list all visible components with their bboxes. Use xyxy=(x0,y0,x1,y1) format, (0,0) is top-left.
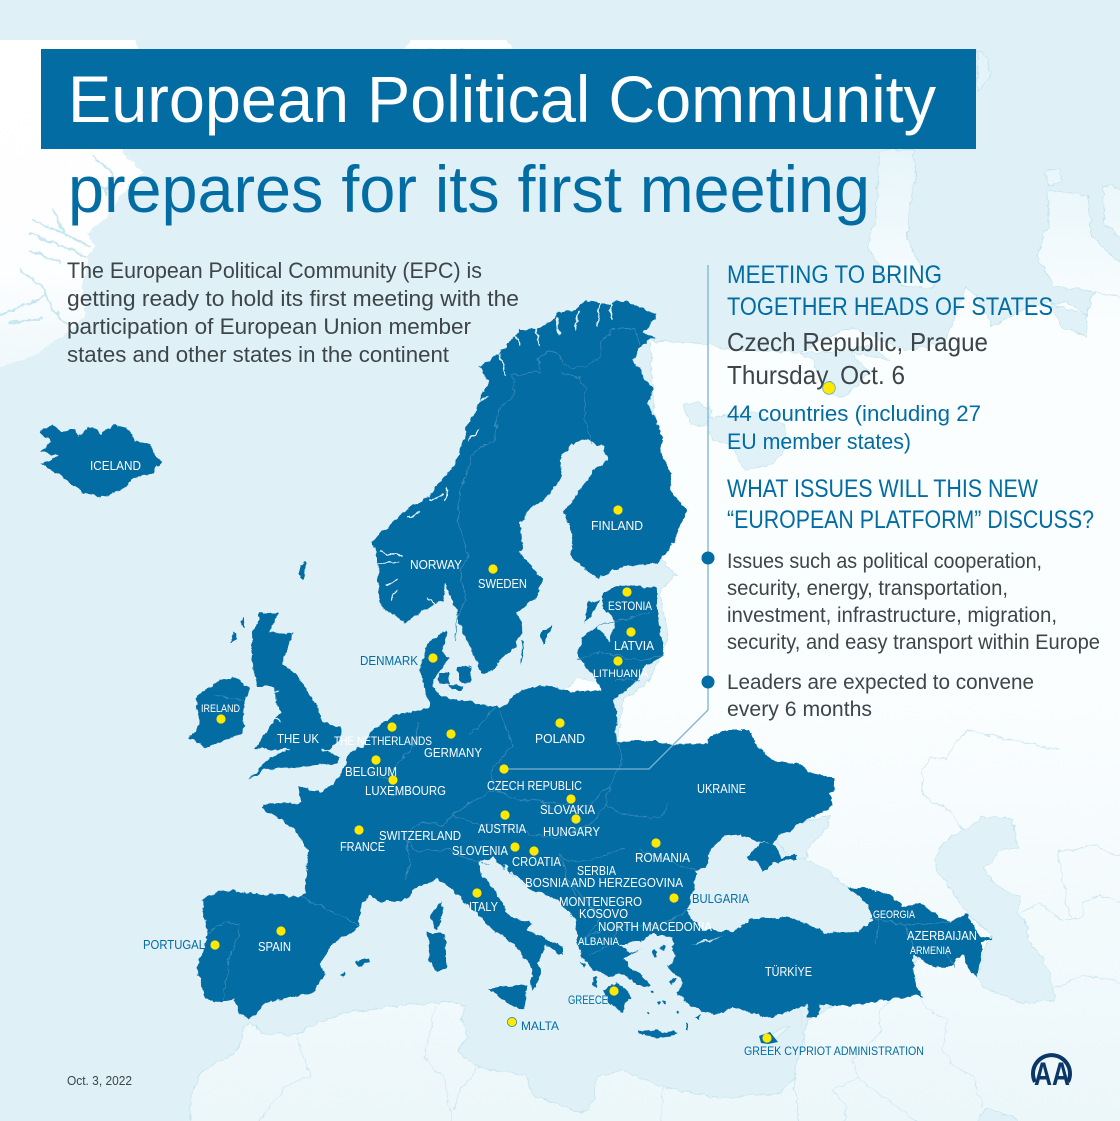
country name labels: MALTA xyxy=(521,1019,559,1033)
islands: Mediterranean and Aegean xyxy=(340,902,702,1038)
issues paragraph: Issues such as political cooperation, xyxy=(727,550,1042,573)
bullet marker one xyxy=(702,552,714,564)
participants xyxy=(727,401,981,454)
country name labels: ROMANIA xyxy=(635,850,690,865)
country: Iceland xyxy=(40,424,162,498)
intro text xyxy=(67,258,519,367)
country name labels: BULGARIA xyxy=(692,891,749,906)
country name labels: GREEK CYPRIOT ADMINISTRATION xyxy=(744,1044,924,1058)
country name labels: AUSTRIA xyxy=(478,821,526,836)
land: Kaliningrad xyxy=(566,678,602,691)
land: Greenland fjords xyxy=(0,157,113,325)
meeting place and date: Czech Republic, Prague xyxy=(727,327,988,357)
country name labels: ARMENIA xyxy=(910,945,952,957)
participants: 44 countries (including 27 xyxy=(727,401,981,426)
country: Estonia, Latvia, Lithuania, Poland, Germany, France, Spain and the rest of the mainland xyxy=(197,585,835,1019)
issues paragraph xyxy=(727,550,1100,654)
intro text: states and other states in the continent xyxy=(67,342,449,367)
country name labels: KOSOVO xyxy=(579,906,628,921)
land: Arctic island east xyxy=(1037,190,1120,300)
country shapes xyxy=(40,300,993,1038)
country name labels: FINLAND xyxy=(591,518,643,533)
country borders xyxy=(208,328,955,1000)
leaders paragraph xyxy=(727,671,1034,721)
country: Peloponnese of Greece xyxy=(603,983,632,1013)
island: Cyprus xyxy=(759,1026,790,1044)
coast cuts: fjords and gulfs xyxy=(248,302,612,886)
country name labels: LATVIA xyxy=(614,638,654,653)
meeting place and date: Thursday, Oct. 6 xyxy=(727,360,905,390)
yellow capital dots xyxy=(210,505,679,1027)
country name labels: SLOVENIA xyxy=(452,843,508,858)
title banner xyxy=(41,49,976,149)
bullet marker two xyxy=(702,676,714,688)
participants: EU member states) xyxy=(727,429,911,454)
land: Novaya Zemlya xyxy=(867,150,935,287)
country name labels: PORTUGAL xyxy=(143,937,205,952)
sea: Ob gulf xyxy=(1050,303,1087,337)
islands: Baltic, Denmark and Scotland xyxy=(230,562,600,690)
sea: Sea of Azov xyxy=(775,815,830,858)
country name labels: THE UK xyxy=(277,731,319,746)
country: Ireland xyxy=(188,677,250,748)
meeting place and date xyxy=(727,327,988,390)
land: northern strip above the title xyxy=(405,30,512,49)
country name labels: MONTENEGRO xyxy=(559,894,642,909)
country name labels: THE NETHERLANDS xyxy=(334,734,432,748)
Moscow dot xyxy=(823,382,835,394)
country name labels: FRANCE xyxy=(340,839,385,854)
country name labels: SWEDEN xyxy=(478,576,527,591)
issues paragraph: security, and easy transport within Europe xyxy=(727,631,1100,654)
country name labels: AZERBAIJAN xyxy=(907,928,977,943)
meeting heading xyxy=(727,261,1053,321)
country: Türkiye and the Caucasus xyxy=(670,887,993,1018)
meeting heading: MEETING TO BRING xyxy=(727,261,942,289)
intro text: The European Political Community (EPC) is xyxy=(67,258,482,283)
sea: Persian Gulf xyxy=(967,1108,1030,1121)
land: Greenland coast xyxy=(0,28,143,369)
country name labels: IRELAND xyxy=(201,703,240,715)
country name labels: SWITZERLAND xyxy=(379,828,461,843)
country name labels: ALBANIA xyxy=(578,936,620,948)
leaders paragraph: every 6 months xyxy=(727,698,872,721)
country name labels: LITHUANIA xyxy=(593,668,649,680)
country name labels: HUNGARY xyxy=(543,824,600,839)
date: Oct. 3, 2022 xyxy=(67,1074,132,1088)
country name labels: LUXEMBOURG xyxy=(365,783,446,798)
country name labels: GEORGIA xyxy=(873,909,916,921)
country name labels: SERBIA xyxy=(577,863,616,878)
country name labels: CZECH REPUBLIC xyxy=(487,778,582,793)
map of participating countries xyxy=(40,265,993,1058)
country: Norway, Sweden and Finland xyxy=(373,300,687,675)
land: North Africa xyxy=(190,1002,800,1121)
country name labels: TÜRKİYE xyxy=(765,964,812,979)
country name labels: CROATIA xyxy=(512,854,561,869)
country name labels: UKRAINE xyxy=(697,781,746,796)
icon: Anadolu Agency logo: AA xyxy=(1034,1056,1070,1092)
country name labels: NORTH MACEDONIA xyxy=(598,919,712,934)
country name labels: NORWAY xyxy=(410,557,462,572)
intro text: participation of European Union member xyxy=(67,314,471,339)
country name labels: SLOVAKIA xyxy=(540,802,595,817)
land: far north-east island xyxy=(1104,185,1120,245)
top sea band xyxy=(0,0,1120,40)
land: Franz Josef island xyxy=(1045,168,1062,186)
country: Crimea xyxy=(747,843,798,872)
meeting heading: TOGETHER HEADS OF STATES xyxy=(727,293,1053,321)
country name labels: POLAND xyxy=(535,731,585,746)
issues heading xyxy=(727,475,1094,534)
issues paragraph: investment, infrastructure, migration, xyxy=(727,604,1057,627)
issues heading: WHAT ISSUES WILL THIS NEW xyxy=(727,475,1038,503)
country name labels: ITALY xyxy=(469,899,498,914)
subtitle: prepares for its first meeting xyxy=(68,152,870,226)
country name labels: ESTONIA xyxy=(608,599,652,613)
country name labels xyxy=(90,458,977,1058)
land: Russia, the Caucasus hinterland and the Middle East xyxy=(617,275,1120,1121)
country name labels: ICELAND xyxy=(90,458,141,473)
country name labels: DENMARK xyxy=(360,653,418,668)
land: Arctic island top xyxy=(977,50,990,90)
country name labels: BELGIUM xyxy=(345,764,397,779)
capital location line xyxy=(504,265,708,769)
leaders paragraph: Leaders are expected to convene xyxy=(727,671,1034,694)
sea: Lake Ladoga xyxy=(683,402,712,425)
issues paragraph: security, energy, transportation, xyxy=(727,577,1008,600)
sea: Lake Onega xyxy=(708,412,786,470)
neighbouring country borders xyxy=(251,730,1120,1121)
country name labels: BOSNIA AND HERZEGOVINA xyxy=(525,875,683,890)
sea: Caspian xyxy=(935,818,1055,1003)
country name labels: SPAIN xyxy=(258,939,291,954)
country name labels: GREECE xyxy=(568,993,608,1007)
country: the UK xyxy=(248,613,342,780)
title line one: European Political Community xyxy=(68,62,936,136)
intro text: getting ready to hold its first meeting with the xyxy=(67,286,519,311)
sea: White Sea xyxy=(800,345,890,397)
country name labels: GERMANY xyxy=(424,745,482,760)
